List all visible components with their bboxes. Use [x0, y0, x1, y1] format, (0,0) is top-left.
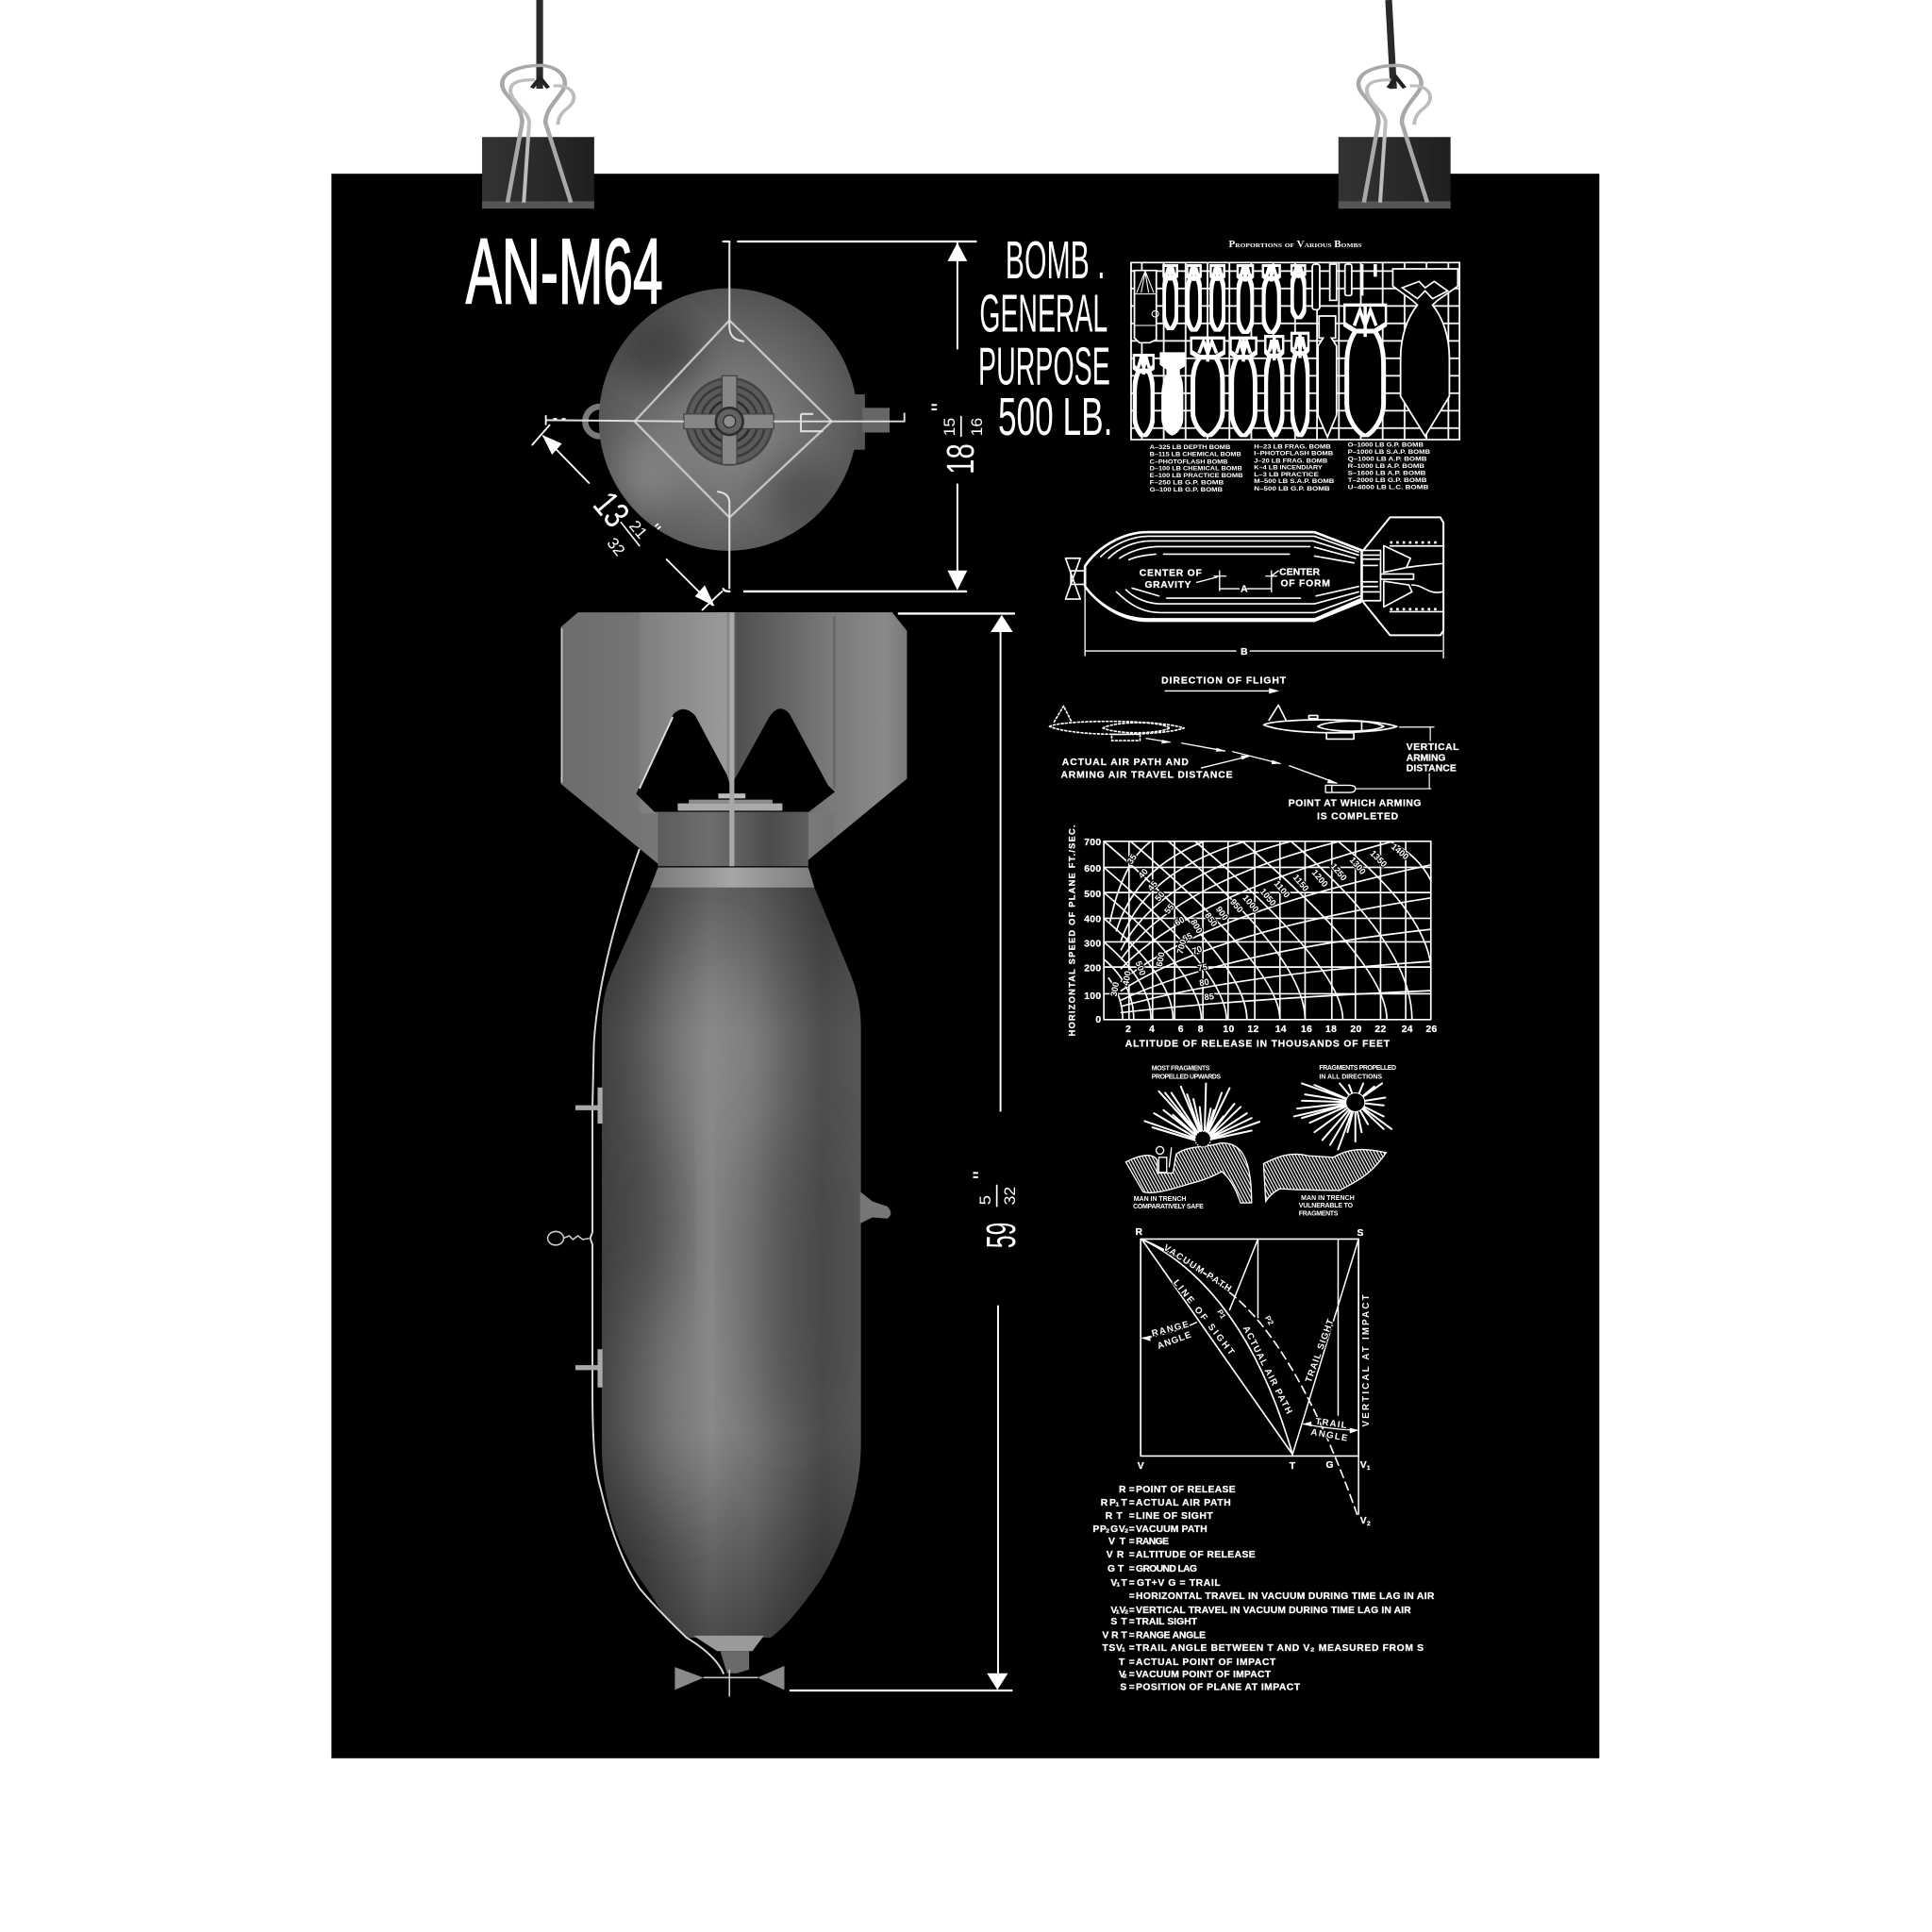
dimension: 18 15/16 height: [724, 242, 986, 591]
legend definitions: =: [1129, 1511, 1135, 1522]
bomb key: P–1000 LB S.A.P. BOMB: [1348, 449, 1430, 456]
left burst: [1144, 1083, 1259, 1141]
x axis: 14: [1275, 1024, 1287, 1035]
speed labels: 800: [1189, 918, 1205, 935]
bomb cross-section: A: [1241, 585, 1248, 595]
rotated path labels: TRAIL: [1315, 1417, 1347, 1431]
legend definitions: =: [1129, 1485, 1135, 1495]
angle labels: 80: [1199, 977, 1209, 988]
arming labels: ARMING: [1407, 753, 1446, 763]
vertex labels: T: [1290, 1461, 1296, 1472]
right ground: [1263, 1150, 1386, 1201]
vertex labels: V: [1138, 1461, 1144, 1472]
x axis: 20: [1350, 1024, 1362, 1035]
legend definitions: POINT OF RELEASE: [1136, 1485, 1236, 1495]
left ground: [1125, 1143, 1252, 1203]
legend definitions: =: [1129, 1606, 1135, 1616]
angle labels: 35: [1125, 853, 1139, 866]
x axis: 10: [1223, 1024, 1235, 1035]
dimension: 13 21/32 diagonal: 13: [585, 485, 637, 535]
speed labels: 500: [1134, 959, 1147, 976]
fragment captions: [1133, 1065, 1396, 1217]
legend definitions: POSITION OF PLANE AT IMPACT: [1136, 1682, 1301, 1692]
arming path arrows: [1146, 727, 1434, 792]
fragment captions: MAN IN TRENCH: [1134, 1196, 1186, 1203]
angle labels: 45: [1146, 879, 1159, 892]
bomb key: J–20 LB FRAG. BOMB: [1254, 458, 1327, 464]
x axis: 4: [1149, 1024, 1155, 1035]
speed labels: 1150: [1291, 873, 1310, 893]
centre rod: [729, 612, 734, 866]
vertex labels: V: [1360, 1460, 1367, 1471]
legend definitions: =: [1129, 1537, 1135, 1547]
chart: bombing table: [1067, 824, 1438, 1049]
legend definitions: =: [1129, 1657, 1135, 1668]
y axis: [1084, 838, 1101, 1025]
arming labels: IS COMPLETED: [1317, 812, 1399, 823]
man in trench: [1157, 1146, 1172, 1173]
rotated path labels: ANGLE: [1310, 1427, 1349, 1444]
arming labels: DISTANCE: [1407, 764, 1457, 774]
fragment captions: FRAGMENTS PROPELLED: [1319, 1065, 1396, 1072]
y axis title: HORIZONTAL SPEED OF PLANE FT./SEC.: [1067, 824, 1076, 1036]
bomb key: I–PHOTOFLASH BOMB: [1254, 451, 1334, 458]
rotated path labels: RANGE: [1151, 1320, 1191, 1340]
bomb key: K–4 LB INCENDIARY: [1254, 465, 1324, 472]
speed labels: 1350: [1368, 848, 1389, 869]
vertex labels: V: [1360, 1516, 1367, 1526]
speed labels: 900: [1214, 905, 1230, 922]
legend definitions: =: [1129, 1564, 1135, 1574]
main bomb side view: [548, 612, 907, 1697]
fragment captions: PROPELLED UPWARDS: [1152, 1074, 1221, 1080]
legend definitions: =: [1129, 1670, 1135, 1680]
bomb key: M–500 LB S.A.P. BOMB: [1254, 478, 1335, 485]
speed labels: 400: [1121, 970, 1133, 986]
plane: at arming: [1263, 705, 1397, 739]
y axis: 100: [1084, 991, 1101, 1002]
burst centre left: [1195, 1131, 1210, 1147]
y axis: 400: [1084, 914, 1101, 924]
legend definitions: VERTICAL TRAVEL IN VACUUM DURING TIME LAG IN AIR: [1136, 1606, 1411, 1616]
tail collar: [658, 812, 808, 866]
bomb key: B–115 LB CHEMICAL BOMB: [1150, 452, 1241, 458]
rotated path labels: TRAIL SIGHT: [1304, 1318, 1336, 1384]
angle labels: 65: [1181, 931, 1193, 943]
speed labels: 300: [1109, 981, 1121, 997]
legend symbols: R: [1119, 1485, 1126, 1495]
speed labels: [1109, 841, 1410, 997]
bomb key: D–100 LB CHEMICAL BOMB: [1150, 466, 1242, 473]
binder clip left: [482, 65, 594, 208]
dimension: 59 5/32 length: 59: [979, 1223, 1024, 1248]
angle labels: 85: [1204, 991, 1214, 1002]
vertex labels: G: [1325, 1460, 1334, 1471]
bomb key: N–500 LB G.P. BOMB: [1254, 486, 1330, 492]
dimension: 13 21/32 diagonal: 32: [604, 534, 628, 559]
arming labels: ARMING AIR TRAVEL DISTANCE: [1060, 771, 1233, 781]
subtitle: 500 LB.: [998, 387, 1112, 446]
legend definitions: [1129, 1485, 1435, 1692]
bomb key: L–3 LB PRACTICE: [1254, 472, 1320, 478]
bomb key: Q–1000 LB A.P. BOMB: [1348, 457, 1427, 463]
P1 and P2 labels: [1215, 1308, 1275, 1327]
rotated path labels: ACTUAL AIR PATH: [1241, 1324, 1294, 1416]
arming wire: [591, 849, 724, 1674]
shoulder band: [650, 868, 814, 888]
speed labels: 1250: [1329, 861, 1349, 883]
legend definitions: GT+V G = TRAIL: [1137, 1578, 1221, 1589]
x axis: 12: [1247, 1024, 1259, 1035]
legend symbols: [1092, 1485, 1129, 1692]
vertex labels: 1: [1367, 1466, 1371, 1472]
speed labels: 600: [1155, 951, 1166, 967]
burst centre right: [1346, 1092, 1365, 1111]
y axis: 300: [1084, 939, 1101, 949]
legend symbols: R T: [1106, 1511, 1123, 1522]
legend definitions: ACTUAL AIR PATH: [1136, 1498, 1231, 1508]
legend definitions: LINE OF SIGHT: [1136, 1511, 1213, 1522]
legend symbols: R P₁ T: [1101, 1498, 1127, 1508]
speed labels: 700: [1175, 939, 1188, 955]
fragment captions: IN ALL DIRECTIONS: [1319, 1074, 1382, 1080]
bomb key: E–100 LB PRACTICE BOMB: [1150, 473, 1243, 479]
angle curves: [1110, 841, 1431, 1012]
diagram frame and paths: [1141, 1239, 1358, 1514]
vertex labels: [1135, 1227, 1371, 1527]
x axis: 2: [1125, 1024, 1131, 1035]
dimension: 18 15/16 height: 18: [939, 443, 982, 475]
dimension: 13 21/32 diagonal: 21: [625, 517, 651, 542]
P1 and P2 labels: P2: [1263, 1314, 1275, 1327]
dimension: 59 5/32 length: 32: [1001, 1187, 1019, 1205]
x axis: 22: [1374, 1024, 1387, 1035]
arming labels: VERTICAL: [1407, 742, 1459, 753]
x axis: 18: [1325, 1024, 1337, 1035]
bomb body: [602, 888, 861, 1638]
speed labels: 850: [1203, 911, 1219, 928]
legend definitions: =: [1129, 1498, 1135, 1508]
legend definitions: =: [1129, 1578, 1135, 1589]
arming ring: [548, 1231, 589, 1245]
legend definitions: TRAIL ANGLE BETWEEN T AND V₂ MEASURED FROM S: [1136, 1643, 1424, 1654]
subtitle: GENERAL: [979, 283, 1108, 342]
legend definitions: VACUUM POINT OF IMPACT: [1136, 1670, 1272, 1680]
grid: [1131, 262, 1459, 440]
legend: trajectory definitions: [1092, 1485, 1435, 1692]
legend symbols: S T: [1110, 1617, 1127, 1627]
rotated path labels: LINE OF SIGHT: [1171, 1278, 1236, 1357]
fragment captions: MOST FRAGMENTS: [1152, 1065, 1210, 1072]
x axis: 24: [1402, 1024, 1413, 1035]
speed labels: 1100: [1273, 879, 1291, 900]
speed labels: 1300: [1348, 856, 1368, 876]
bomb key: [1150, 442, 1430, 493]
bomb key: A–325 LB DEPTH BOMB: [1150, 444, 1231, 451]
rotated path labels: [1151, 1242, 1372, 1444]
title: AN-M64: [466, 219, 663, 323]
rotated path labels: ANGLE: [1156, 1330, 1193, 1352]
legend symbols: V₂: [1119, 1670, 1127, 1680]
bomb key: H–23 LB FRAG. BOMB: [1254, 444, 1331, 450]
legend definitions: =: [1129, 1550, 1135, 1560]
vertex labels: R: [1135, 1227, 1142, 1238]
right burst: [1294, 1083, 1391, 1149]
bomb cross-section: GRAVITY: [1144, 580, 1191, 591]
legend definitions: RANGE ANGLE: [1136, 1630, 1206, 1641]
x axis: 8: [1198, 1024, 1204, 1035]
arming labels: ACTUAL AIR PATH AND: [1062, 758, 1189, 768]
y axis: 0: [1095, 1015, 1101, 1025]
hanging string left: [537, 0, 542, 89]
side lug: [860, 1191, 891, 1224]
bomb key: R–1000 LB A.P. BOMB: [1348, 463, 1424, 470]
y axis: 600: [1084, 864, 1101, 874]
legend symbols: V₁ T: [1110, 1578, 1127, 1589]
x axis: [1125, 1024, 1438, 1035]
legend definitions: =: [1129, 1643, 1135, 1654]
angle labels: 40: [1137, 867, 1150, 880]
legend definitions: =: [1129, 1682, 1135, 1692]
bomb key: C–PHOTOFLASH BOMB: [1150, 459, 1228, 465]
rear end view of bomb: [546, 242, 905, 589]
angle labels: 70: [1191, 944, 1204, 957]
legend definitions: ALTITUDE OF RELEASE: [1136, 1550, 1256, 1560]
bomb key: O–1000 LB G.P. BOMB: [1348, 442, 1424, 448]
subtitle: PURPOSE: [978, 337, 1110, 396]
arming labels: POINT AT WHICH ARMING: [1289, 798, 1422, 808]
bomb key: G–100 LB G.P. BOMB: [1150, 487, 1223, 493]
speed curves: [1104, 841, 1431, 1020]
panel: proportions of various bombs: [1131, 240, 1459, 493]
legend definitions: HORIZONTAL TRAVEL IN VACUUM DURING TIME LAG IN AIR: [1136, 1591, 1435, 1602]
bomb key: S–1600 LB A.P. BOMB: [1348, 471, 1426, 476]
speed labels: 1050: [1258, 887, 1278, 908]
fragment captions: COMPARATIVELY SAFE: [1133, 1204, 1204, 1210]
y axis: 500: [1084, 890, 1101, 900]
arming labels: [1060, 742, 1459, 823]
grid: [1104, 841, 1431, 1020]
angle labels: 50: [1153, 890, 1167, 903]
x axis: 26: [1425, 1024, 1438, 1035]
legend definitions: ACTUAL POINT OF IMPACT: [1136, 1657, 1276, 1668]
dimension: 59 5/32 length: ": [970, 1171, 995, 1179]
x axis: 16: [1301, 1024, 1312, 1035]
hanging string right: [1389, 0, 1393, 89]
x axis: 6: [1178, 1024, 1184, 1035]
bomb cross-section: CENTER OF: [1140, 569, 1202, 579]
body shading: [608, 888, 858, 1638]
direction of flight: DIRECTION OF FLIGHT: [1161, 675, 1287, 686]
legend definitions: RANGE: [1136, 1537, 1169, 1547]
y axis: 200: [1084, 963, 1101, 974]
speed labels: 1200: [1310, 868, 1330, 889]
dimension: 13 21/32 diagonal: [532, 425, 722, 610]
panel title: Proportions of Various Bombs: [1229, 240, 1362, 250]
angle labels: 75: [1197, 962, 1208, 973]
panel: fragment patterns: [1125, 1065, 1396, 1217]
rotated path labels: VACUUM PATH: [1161, 1242, 1233, 1294]
dimension: 13 21/32 diagonal: ": [643, 520, 664, 540]
legend definitions: =: [1129, 1524, 1135, 1535]
vertex labels: 2: [1367, 1521, 1371, 1527]
subtitle: [978, 230, 1112, 446]
binder clip right: [1339, 65, 1451, 208]
rotated path labels: VERTICAL AT IMPACT: [1361, 1294, 1372, 1426]
P1 and P2 labels: P1: [1215, 1308, 1227, 1321]
nose cone and vanes: [675, 1636, 784, 1697]
legend definitions: =: [1129, 1630, 1135, 1641]
angle labels: 55: [1162, 902, 1176, 916]
panel: trail and range diagram: [1135, 1227, 1372, 1527]
subtitle: BOMB .: [1006, 230, 1106, 290]
legend symbols: G T: [1108, 1564, 1124, 1574]
suspension lug lower: [575, 1349, 603, 1388]
legend definitions: GROUND LAG: [1136, 1564, 1197, 1574]
legend definitions: =: [1129, 1617, 1135, 1627]
bomb silhouettes: [1133, 264, 1457, 437]
angle labels: 60: [1173, 915, 1186, 928]
poster background: [331, 174, 1599, 1758]
legend definitions: =: [1129, 1591, 1135, 1602]
bomb cross-section: CENTER: [1279, 568, 1321, 578]
legend symbols: V R: [1107, 1550, 1124, 1560]
y axis: 700: [1084, 838, 1101, 848]
legend symbols: V₁ V₂: [1110, 1606, 1129, 1616]
angle labels: [1125, 853, 1214, 1002]
bomb cross-section: OF FORM: [1280, 578, 1330, 589]
bomb key: U–4000 LB L.C. BOMB: [1348, 485, 1429, 491]
panel: bomb cross-section and arming diagram: [1049, 517, 1459, 823]
bomb key: T–2000 LB G.P. BOMB: [1348, 477, 1427, 484]
x axis title: ALTITUDE OF RELEASE IN THOUSANDS OF FEET: [1125, 1039, 1391, 1049]
legend symbols: T S V₁: [1102, 1643, 1125, 1654]
direction of flight: [1161, 675, 1287, 693]
dimension: 18 15/16 height: 15: [941, 418, 958, 436]
bomb cross-section: [1065, 517, 1443, 658]
dimension: 18 15/16 height: ": [926, 403, 955, 411]
bomb cross-section: B: [1241, 647, 1248, 658]
legend symbols: S: [1120, 1682, 1127, 1692]
dimension: 59 5/32 length: [791, 613, 1024, 1690]
speed labels: 1000: [1241, 893, 1260, 914]
fragment captions: VULNERABLE TO: [1299, 1203, 1354, 1209]
suspension lug upper: [575, 1088, 603, 1124]
fragment captions: FRAGMENTS: [1299, 1210, 1339, 1217]
dimension: 18 15/16 height: 16: [968, 418, 986, 436]
dimension: 59 5/32 length: 5: [976, 1195, 994, 1205]
legend symbols: T: [1119, 1657, 1125, 1668]
legend definitions: TRAIL SIGHT: [1136, 1617, 1198, 1627]
legend definitions: VACUUM PATH: [1136, 1524, 1208, 1535]
speed labels: 1400: [1390, 841, 1410, 861]
plane: dropping position: [1049, 706, 1184, 741]
fragment captions: MAN IN TRENCH: [1301, 1195, 1355, 1202]
bomb key: F–250 LB G.P. BOMB: [1150, 480, 1224, 487]
legend symbols: V T: [1108, 1537, 1126, 1547]
legend symbols: V R T: [1102, 1630, 1127, 1641]
legend symbols: P P₂ G V₂: [1092, 1524, 1129, 1535]
vertex labels: S: [1357, 1228, 1364, 1239]
tail fins: [560, 612, 907, 864]
speed labels: 950: [1228, 897, 1245, 914]
